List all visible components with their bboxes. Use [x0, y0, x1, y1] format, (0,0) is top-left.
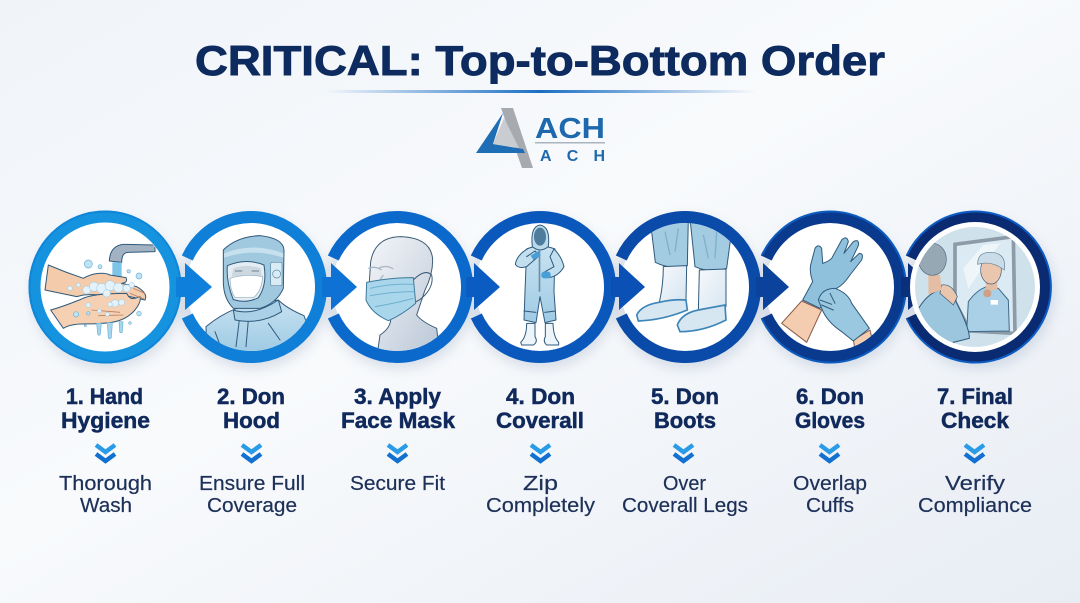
step 3 ring [332, 217, 467, 357]
step 6 label: 6. Don [796, 384, 864, 409]
step 7 label: Verify [945, 473, 1005, 495]
icon: chevrons 4 [531, 445, 550, 461]
icon: hand washing [45, 244, 155, 339]
icon: chevrons 2 [242, 445, 261, 461]
logo: ACH: ACH [540, 148, 605, 165]
step 7 label [918, 384, 1032, 517]
arrow 6 to 7 [901, 263, 935, 310]
step 5 label: 5. Don [651, 384, 719, 409]
step 5 ring [620, 217, 755, 357]
step 4 ring [475, 217, 610, 357]
step 6 label: Cuffs [806, 495, 854, 517]
step 4 label: Zip [523, 473, 558, 495]
step 3 label: Face Mask [341, 408, 456, 433]
step 2 label: Ensure Full [199, 473, 305, 495]
arrow 3 to 4 [466, 263, 500, 310]
title: CRITICAL: Top-to-Bottom Order [195, 37, 885, 84]
arrow 5 to 6 [756, 263, 789, 310]
step 3 label: Secure Fit [350, 473, 445, 495]
step 1 label: Wash [80, 495, 132, 517]
step 7 label: 7. Final [937, 384, 1013, 409]
step 1 label: Thorough [59, 473, 152, 495]
icon: final check at mirror [910, 222, 1043, 352]
step 5 label [622, 384, 748, 517]
step 6 label: Gloves [795, 408, 865, 433]
step 5 label: Over [663, 473, 706, 495]
step 7 ring [907, 212, 1051, 362]
icon: hood [206, 236, 317, 352]
step 4 label [486, 384, 595, 517]
step 5 label: Coverall Legs [622, 495, 748, 517]
step 2 ring [186, 217, 321, 357]
icon: gloves [781, 237, 872, 346]
step 2 label [199, 384, 305, 517]
title underline [325, 90, 755, 93]
step 4 label: Coverall [496, 408, 584, 433]
step 1 label: Hygiene [61, 408, 150, 433]
step 7 label: Compliance [918, 495, 1032, 517]
icon: chevrons 5 [674, 445, 693, 461]
logo: ACH [476, 108, 605, 168]
icon: chevrons 3 [388, 445, 407, 461]
step 6 label [793, 384, 867, 517]
step 1 ring [30, 212, 180, 362]
step 2 label: Hood [223, 408, 280, 433]
step 4 label: Completely [486, 495, 595, 517]
ring shadows [31, 217, 1055, 369]
icon: chevrons 6 [820, 445, 839, 461]
step 1 label: 1. Hand [66, 384, 143, 409]
step 3 label: 3. Apply [354, 384, 442, 409]
icon: chevrons 1 [96, 445, 115, 461]
step 6 ring [762, 212, 906, 362]
icon: face mask [366, 237, 440, 358]
step 2 label: Coverage [207, 495, 297, 517]
step 4 label: 4. Don [506, 384, 575, 409]
step 3 label [341, 384, 456, 495]
step 2 label: 2. Don [217, 384, 285, 409]
step 5 label: Boots [654, 408, 716, 433]
logo: ACH: ACH [535, 113, 605, 145]
arrow 4 to 5 [611, 263, 645, 310]
icon: boots [637, 218, 733, 332]
arrow 2 to 3 [322, 263, 357, 310]
arrow 1 to 2 [176, 263, 212, 310]
icon: coverall [515, 225, 564, 345]
step 1 label [59, 384, 152, 517]
icon: chevrons 7 [965, 445, 984, 461]
step 6 label: Overlap [793, 473, 867, 495]
step 7 label: Check [941, 408, 1010, 433]
